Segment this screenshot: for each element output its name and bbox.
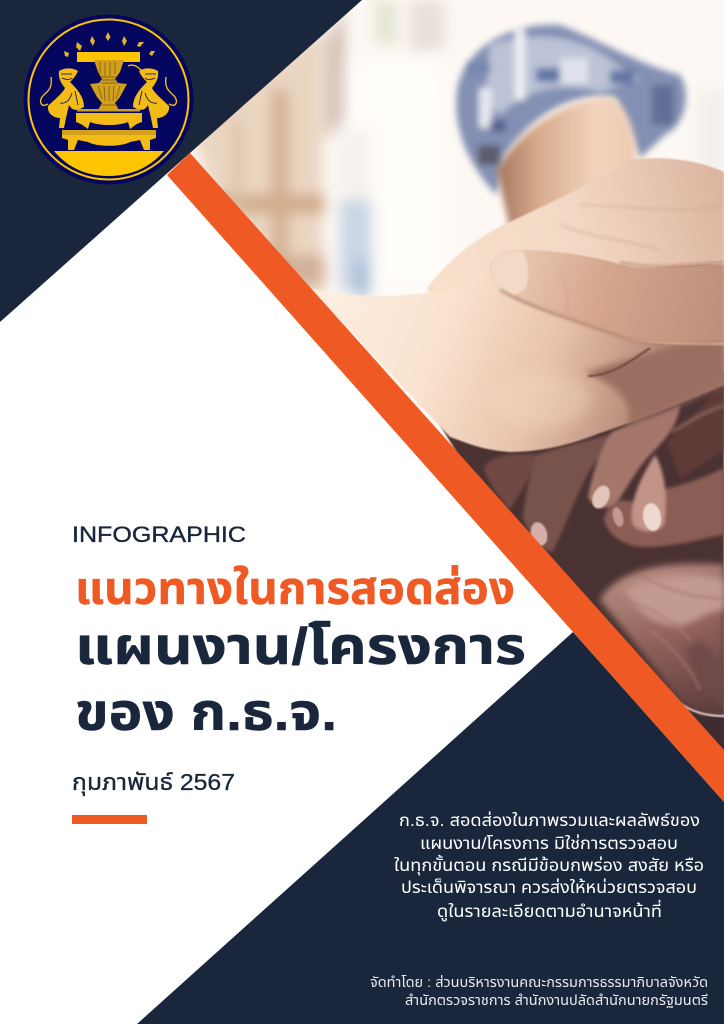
- orange accent bar: [72, 815, 147, 824]
- bottom hand: [600, 564, 724, 770]
- left lion: [48, 68, 84, 128]
- emblem seal: [24, 14, 194, 184]
- description paragraph: ประเด็นพิจารณา ควรส่งให้หน่วยตรวจสอบ: [401, 877, 697, 897]
- title line 3 navy: ของ ก.ธ.จ.: [75, 684, 337, 742]
- fingernails: [528, 483, 663, 548]
- orange diagonal band: [167, 153, 724, 802]
- description paragraph: ดูในรายละเอียดตามอำนาจหน้าที่: [437, 899, 662, 923]
- footer credit: จัดทำโดย : ส่วนบริหารงานคณะกรรมการธรรมาภิบาลจังหวัด: [370, 974, 708, 990]
- description paragraph: ก.ธ.จ. สอดส่องในภาพรวมและผลลัพธ์ของ: [399, 811, 700, 830]
- footer credit: [370, 974, 708, 1008]
- right lion: [133, 68, 169, 128]
- description paragraph: ในทุกขั้นตอน กรณีมีข้อบกพร่อง สงสัย หรือ: [394, 854, 704, 876]
- flame ornaments: [64, 32, 155, 57]
- footer credit: สำนักตรวจราชการ สำนักงานปลัดสำนักนายกรัฐมนตรี: [405, 992, 708, 1008]
- top hand: [427, 158, 724, 345]
- bar and pedestal bowl: [77, 52, 140, 62]
- yellow base segment: [54, 151, 164, 176]
- forearm: [310, 275, 724, 452]
- date: กุมภาพันธ์ 2567: [72, 769, 235, 796]
- title line 2 navy: แผนงาน/โครงการ: [75, 618, 526, 676]
- label: INFOGRAPHIC: INFOGRAPHIC: [72, 522, 246, 547]
- navy corner top-left: [0, 0, 362, 322]
- description paragraph: แผนงาน/โครงการ มิใช่การตรวจสอบ: [420, 834, 678, 853]
- plaid sleeve: [456, 25, 686, 195]
- navy panel bottom-right: [137, 632, 724, 1024]
- title line 1 orange: แนวทางในการสอดส่อง: [75, 563, 515, 614]
- description paragraph: [394, 811, 704, 923]
- dark finger shapes: [484, 385, 724, 552]
- upper table: [76, 113, 142, 129]
- background photo: joined hands: [160, 0, 724, 770]
- lower table: [62, 130, 156, 135]
- white panel: [0, 175, 573, 1024]
- lower dark hands base: [440, 370, 724, 718]
- upper arm: [497, 97, 636, 230]
